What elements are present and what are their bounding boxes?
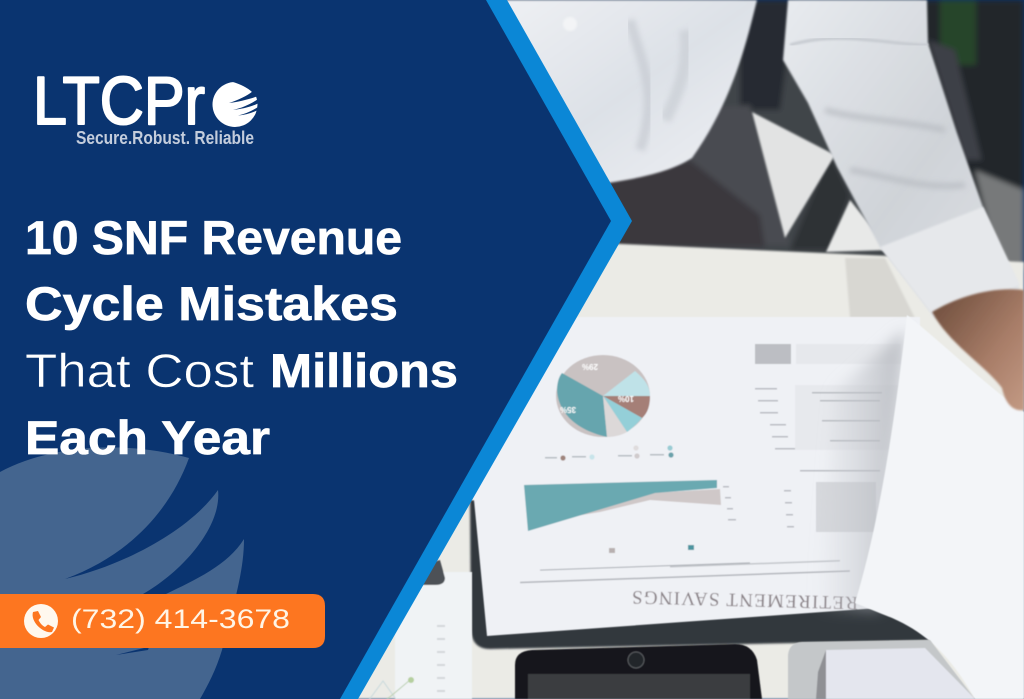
photo: white shirt (500, 0, 757, 183)
phone number: (732) 414-3678 (71, 604, 290, 634)
title line 3: Millions (270, 344, 458, 397)
report heading, upside down: RETIREMENT SAVINGS (632, 586, 858, 613)
logo (33, 63, 259, 148)
title line 1: 10 SNF Revenue (25, 211, 402, 264)
photo background: office behind the desk (490, 0, 1024, 270)
photo: lower-left chart sheet and phone (360, 560, 472, 699)
logo wordmark: LTCPr (33, 63, 205, 139)
pie chart: 29% (582, 362, 598, 371)
title line 3: That Cost (25, 344, 254, 397)
title (25, 211, 458, 464)
watermark: swoosh globe (0, 447, 244, 699)
pie chart: 10% (618, 394, 634, 403)
photo: hand holding the page (932, 289, 1024, 410)
title line 2: Cycle Mistakes (25, 277, 398, 330)
photo: curled page (855, 315, 1024, 699)
pie chart (556, 355, 650, 437)
title line 3 (25, 344, 458, 397)
callout: phone number pill (0, 594, 325, 648)
pie legend (545, 445, 674, 461)
title line 4: Each Year (25, 411, 270, 464)
panel: navy chevron (0, 0, 611, 699)
photo: tablet on the desk (515, 644, 762, 699)
photo: shadow across the report (815, 330, 905, 610)
report table blocks (755, 344, 791, 364)
logo tagline: Secure.Robust. Reliable (76, 128, 254, 148)
area chart (524, 480, 721, 553)
photo: businessman reviewing financial report at desk (340, 0, 1024, 699)
photo: laptop behind the man (752, 112, 890, 252)
photo: printed financial report (468, 317, 920, 636)
pie labels: 35% (560, 405, 576, 414)
icon: phone (24, 604, 58, 638)
accent band: bright blue chevron (0, 0, 632, 699)
logo icon: swoosh globe (212, 82, 259, 127)
photo: dark clipboard under the report (470, 500, 950, 649)
photo: notebook and laptop corner (788, 640, 975, 699)
photo: shirt sleeve and cuff (783, 0, 1020, 318)
photo: white desk surface (340, 243, 1024, 699)
